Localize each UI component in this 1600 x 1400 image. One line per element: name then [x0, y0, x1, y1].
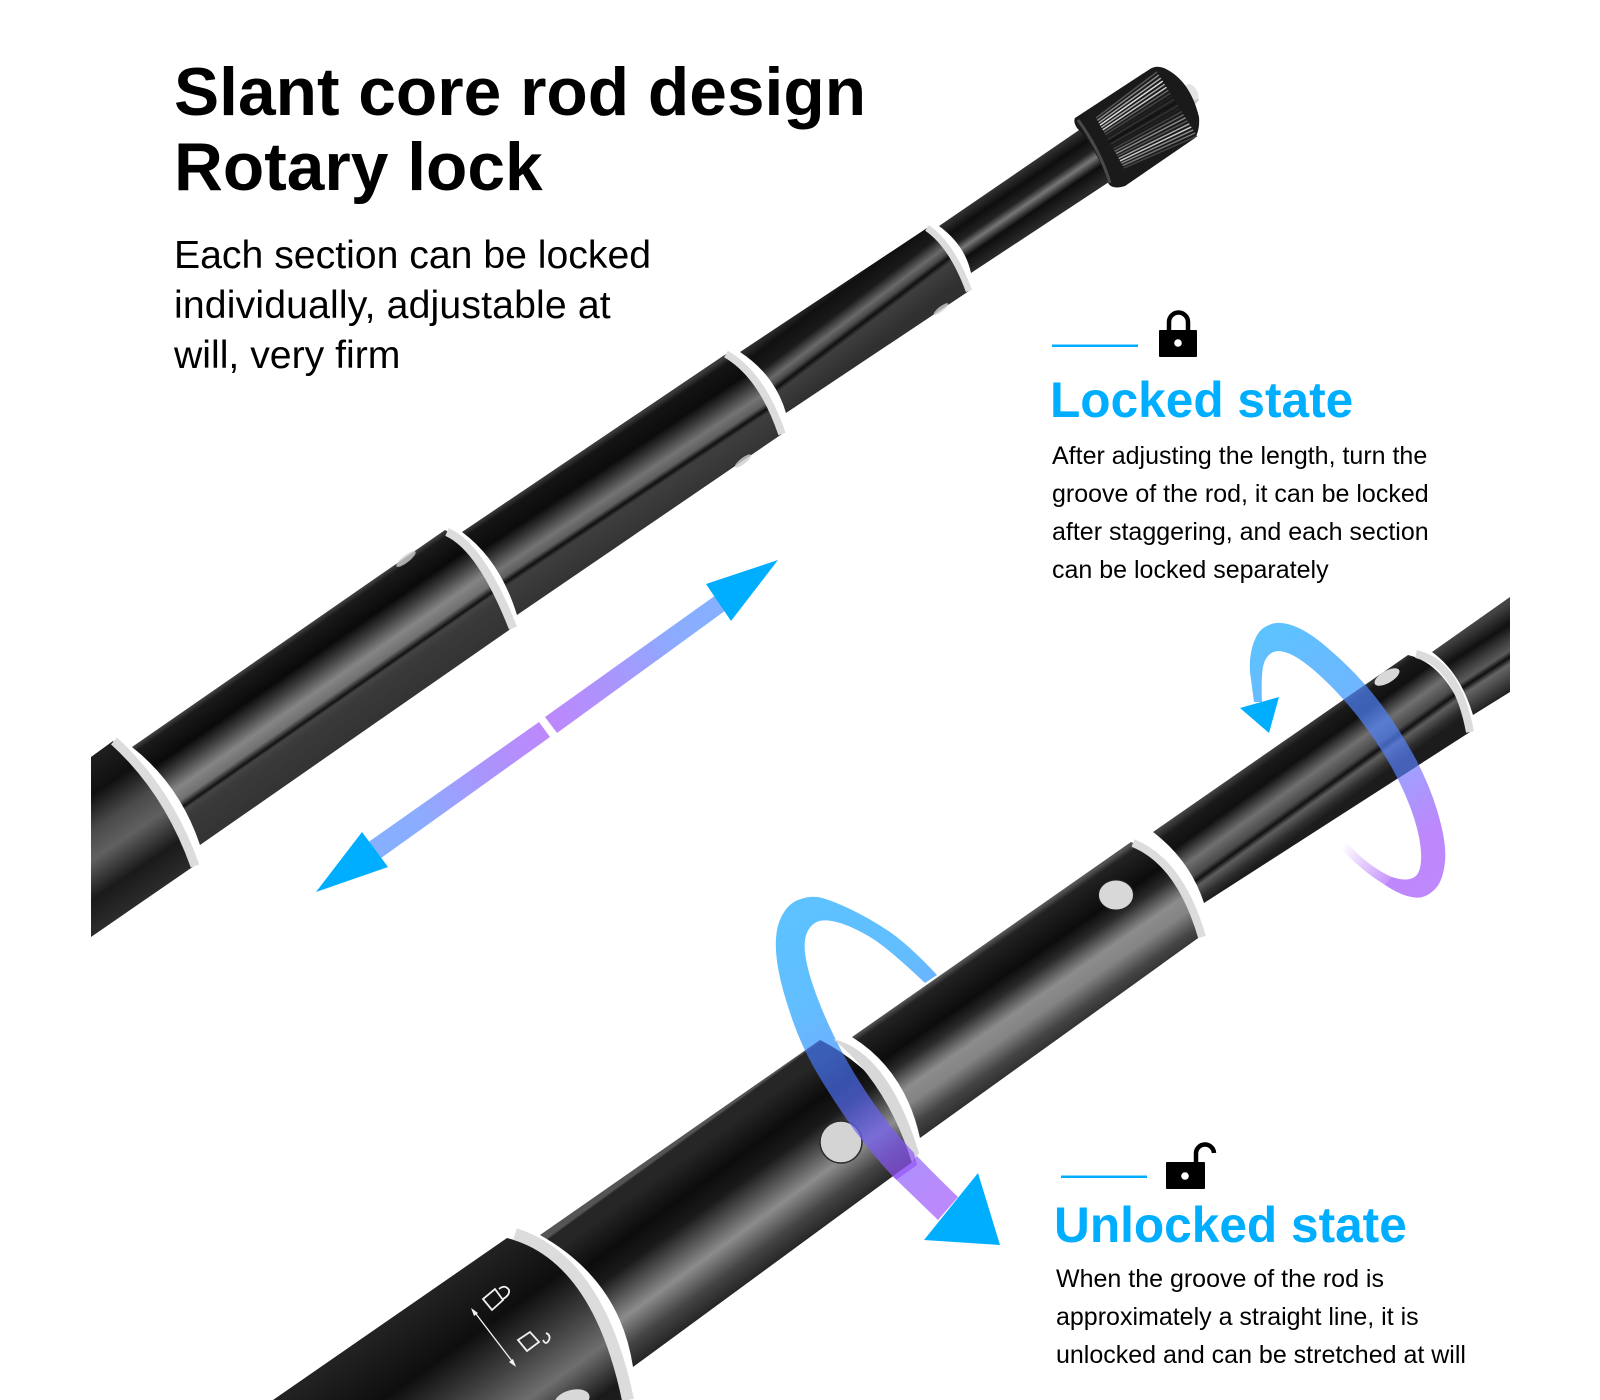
lower rod section 2 [852, 842, 1201, 1138]
lower rod section 3 [1153, 655, 1470, 903]
intro text: will, very firm [173, 334, 400, 377]
lower rod section 1 [540, 1040, 915, 1367]
rod side pins [394, 301, 950, 569]
icon: closed padlock [1159, 312, 1197, 357]
lower rod base section [273, 1238, 628, 1400]
stretch arrow upper stem [545, 590, 733, 733]
section 4 rod [740, 228, 969, 413]
knob screw stud [1170, 82, 1201, 110]
unlocked state description: When the groove of the rod is [1056, 1265, 1384, 1293]
rotation arrow band behind rods: lower [776, 897, 958, 1220]
locked accent line [1052, 344, 1138, 347]
lower rod pin at ring B [1098, 880, 1134, 910]
knurled knob [1074, 67, 1199, 187]
stretch double arrow [316, 560, 778, 892]
title: Rotary lock [174, 130, 543, 205]
locked state description: groove of the rod, it can be locked [1052, 480, 1429, 508]
unlocked state description: unlocked and can be stretched at will [1056, 1341, 1466, 1369]
icon: open padlock [1166, 1145, 1214, 1189]
upper arrowhead [706, 560, 778, 621]
unlocked state description: approximately a straight line, it is [1056, 1303, 1419, 1331]
upper telescopic rod [91, 67, 1201, 937]
section 5 thin rod [939, 126, 1115, 273]
rod ring 3 [726, 354, 782, 434]
rotation arrow overlay: unlocked [805, 1040, 1000, 1245]
lower rod pin at ring A [1372, 665, 1402, 689]
intro text: individually, adjustable at [174, 284, 611, 327]
panel: locked state [1050, 312, 1429, 584]
engraved lock symbol on rod [483, 1287, 509, 1310]
rod ring 2 [447, 532, 513, 628]
stretch arrow lower stem [360, 722, 550, 866]
title: Slant core rod design [174, 55, 866, 130]
rod ring 4 [927, 228, 969, 291]
locked state description: after staggering, and each section [1052, 518, 1429, 546]
unlocked state heading: Unlocked state [1054, 1197, 1407, 1253]
section 2 rod [132, 530, 512, 845]
lower rod pin at ring C [820, 1121, 862, 1163]
engraved unlock symbol on rod [518, 1332, 550, 1351]
lower rod ring B [1133, 843, 1202, 937]
rod ring 1 [114, 741, 195, 866]
lower arrowhead [316, 832, 388, 892]
engraved two-way arrow on rod [471, 1308, 516, 1367]
locked state heading: Locked state [1050, 372, 1353, 428]
lower rod pin at base [552, 1386, 592, 1400]
rotation arrow band behind rods: upper [1250, 623, 1445, 898]
lower rod thin end section [1432, 597, 1510, 715]
unlocked arrowhead [924, 1173, 1000, 1245]
lower rod ring C [833, 1039, 919, 1163]
locked state description: can be locked separately [1052, 556, 1329, 584]
intro text: Each section can be locked [174, 234, 651, 277]
section 3 rod [462, 354, 782, 615]
locked state description: After adjusting the length, turn the [1052, 442, 1427, 470]
lower rod ring D [515, 1234, 628, 1400]
lower rod ring A [1416, 654, 1470, 732]
lower telescopic rod [273, 597, 1510, 1400]
rotation arrow overlay: locked [1240, 684, 1419, 778]
unlocked accent line [1061, 1176, 1147, 1178]
section 1 rod [91, 741, 194, 937]
locked arrowhead [1240, 697, 1279, 733]
panel: unlocked state [1054, 1145, 1466, 1369]
